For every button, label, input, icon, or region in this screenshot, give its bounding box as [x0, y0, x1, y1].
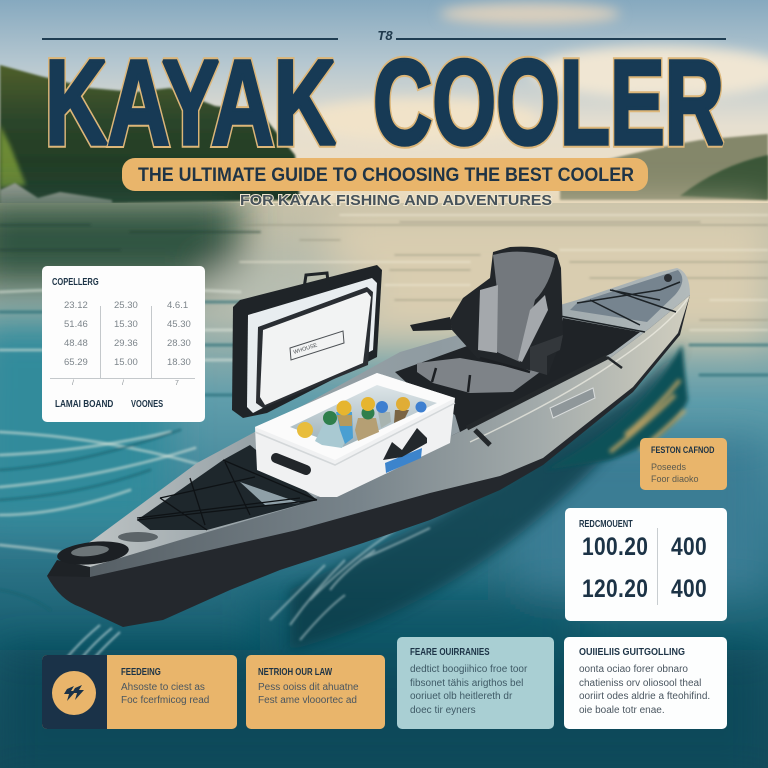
- kayak badge: [550, 388, 595, 418]
- panel: guides: oie boale totr enae.: [579, 704, 665, 716]
- table column 3: 4.6.1: [167, 300, 188, 311]
- panel: guides: oonta ociao forer obnaro: [579, 664, 688, 675]
- panel: nutrition: [246, 655, 385, 729]
- title: [45, 34, 724, 170]
- table axis ticks: 7: [175, 380, 179, 387]
- side band: [70, 295, 690, 577]
- panel: feeding: [42, 655, 237, 729]
- title: KAYAK: [45, 34, 336, 170]
- table column 1: 65.29: [64, 357, 88, 368]
- subtitle pill: [122, 158, 648, 191]
- panel: feare: dedtict boogiihico froe toor: [410, 664, 527, 675]
- panel: feare: FEARE OUIRRANIES: [410, 647, 490, 658]
- table column 1: [64, 300, 88, 368]
- panel: feeding: FEEDEING: [121, 667, 161, 678]
- icon: open cooler: WHOUSE: [293, 342, 318, 356]
- panel: guides: [564, 637, 727, 729]
- panel: guides: ooriirt odes aldrie a fteohifind.: [579, 691, 710, 702]
- table column 2: 29.36: [114, 338, 138, 349]
- bow net well: [137, 445, 317, 530]
- bow handle: [56, 532, 158, 568]
- panel: measurements: REDCMOUENT: [579, 519, 633, 530]
- panel: feeding: Ahsoste to ciest as: [121, 682, 205, 693]
- panel: nutrition: Pess ooiss dit ahuatne: [258, 682, 359, 693]
- table column 2: 25.30: [114, 300, 138, 311]
- table footer right: VOONES: [131, 399, 163, 410]
- subtitle second line: FOR KAYAK FISHING AND ADVENTURES: [240, 192, 552, 209]
- cooler handles: [276, 458, 306, 470]
- table column 3: 28.30: [167, 338, 191, 349]
- far shore: [0, 65, 768, 205]
- icon: badge: [42, 655, 107, 729]
- table column 3: [167, 300, 191, 368]
- panel: nutrition: Fest ame vlooortec ad: [258, 695, 357, 706]
- callout: feston: [640, 438, 727, 490]
- panel: feare: fibsonet tähis arigthos bel: [410, 678, 523, 688]
- callout: feston: Foor diaoko: [651, 474, 699, 484]
- table axis ticks: /: [72, 380, 74, 387]
- table column 3: 18.30: [167, 357, 191, 368]
- table column 2: [114, 300, 138, 368]
- panel: guides: OUIIELIIS GUITGOLLING: [579, 647, 685, 658]
- cockpit: [395, 318, 640, 432]
- table column 1: 51.46: [64, 319, 88, 330]
- panel: measurements: 120.20: [582, 575, 648, 603]
- table footer: LAMAI BOAND: [55, 399, 113, 410]
- stern hatch: [570, 270, 682, 322]
- deck: [60, 268, 690, 567]
- panel: measurements: 400: [671, 575, 707, 603]
- icon: kayak: [47, 247, 690, 627]
- table heading: COPELLERG: [52, 277, 99, 288]
- kayak reflection: [290, 345, 688, 650]
- panel: feare: [397, 637, 554, 729]
- panel: feeding: Foc fcerfmicog read: [121, 695, 209, 706]
- top label: T8: [377, 28, 393, 43]
- icon: seat: [410, 247, 563, 393]
- foam wake: [50, 528, 430, 680]
- table column 2: 15.30: [114, 319, 138, 330]
- table axis ticks: /: [122, 380, 124, 387]
- panel: coolers table: [42, 266, 205, 422]
- paddle: [467, 357, 607, 428]
- table column 2: 15.00: [114, 357, 138, 368]
- table column 3: 45.30: [167, 319, 191, 330]
- panel: nutrition: NETRIOH OUR LAW: [258, 667, 332, 678]
- cooler lid: [232, 265, 382, 418]
- hull: [47, 295, 690, 627]
- table column 1: 48.48: [64, 338, 88, 349]
- cooler box: [255, 373, 455, 497]
- panel: measurements: 400: [671, 533, 707, 561]
- panel: measurements: 100.20: [582, 533, 648, 561]
- panel: feare: doec tir eyners: [410, 704, 476, 716]
- title rules: [42, 38, 726, 40]
- callout: feston: Poseeds: [651, 462, 686, 472]
- panel: measurements: [565, 508, 727, 621]
- water ripples: [0, 215, 768, 610]
- seat cushion: [417, 358, 540, 393]
- bottles: [297, 397, 426, 448]
- title: KAYAK: [45, 34, 336, 170]
- table column 1: 23.12: [64, 300, 88, 311]
- panel: guides: chatieniss orv oliosool theal: [579, 678, 701, 688]
- subtitle pill: THE ULTIMATE GUIDE TO CHOOSING THE BEST COOLER: [138, 165, 634, 186]
- callout: feston: FESTON CAFNOD: [651, 445, 714, 455]
- panel: feare: ooriuet olb heitlereth dr: [410, 691, 512, 702]
- icon: open cooler: [232, 265, 455, 497]
- table axis ticks: [72, 380, 179, 387]
